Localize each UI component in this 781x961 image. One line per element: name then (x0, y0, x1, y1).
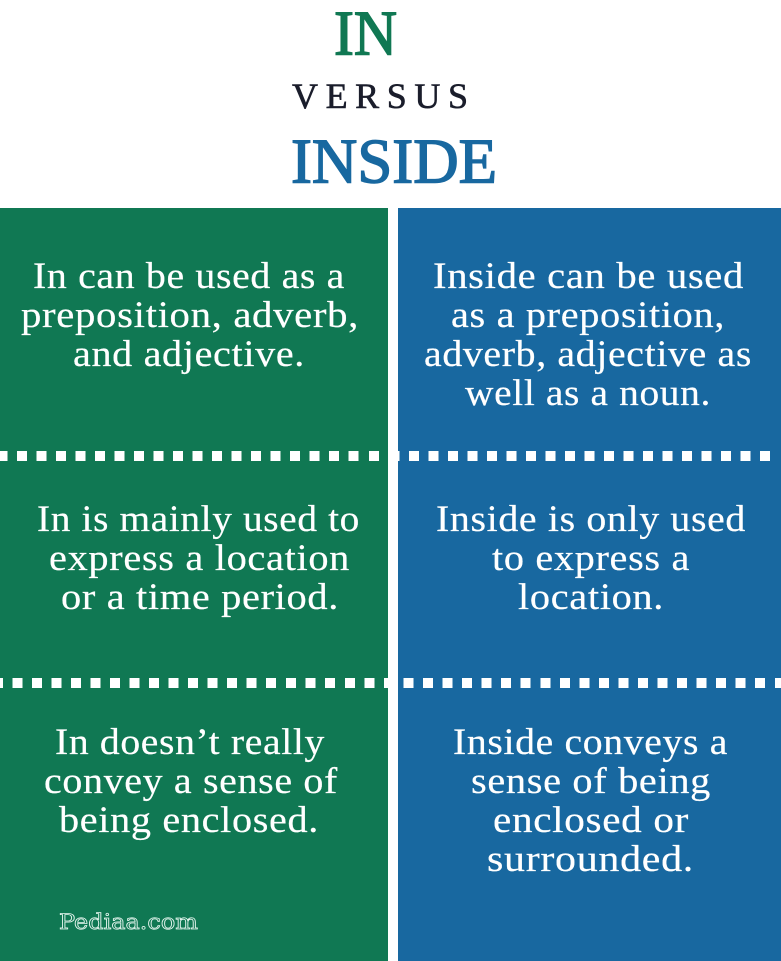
divider: first dotted row (0, 451, 770, 461)
title: INSIDE: INSIDE (291, 126, 497, 196)
text block: Inside sense (453, 722, 728, 880)
text block: In usage: or a time period. (61, 577, 339, 618)
panel: In column (0, 208, 388, 961)
text block: Inside parts of speech: Inside can be used (433, 256, 744, 297)
text block: In sense: In doesn’t really (55, 722, 325, 763)
text block: Inside usage (436, 499, 746, 618)
text block: In sense (44, 722, 338, 841)
text block: In parts of speech (21, 256, 359, 375)
text block: Inside usage: location. (518, 577, 664, 618)
text block: In sense: being enclosed. (59, 800, 319, 841)
text block: Inside parts of speech: well as a noun. (465, 373, 711, 414)
text block: Inside sense: surrounded. (487, 839, 694, 880)
logo: Pediaa.com: Pediaa.com (59, 910, 198, 934)
text block: Inside sense: enclosed or (493, 800, 689, 841)
text block: Inside parts of speech (424, 256, 752, 414)
text block: Inside sense: Inside conveys a (453, 722, 728, 763)
heading: VERSUS: VERSUS (292, 76, 468, 116)
panel: Inside column (398, 208, 781, 961)
text block: In usage: In is mainly used to (37, 499, 360, 540)
divider: second dotted row (0, 678, 781, 688)
text block: Inside sense: sense of being (471, 761, 711, 802)
text block: In usage (37, 499, 360, 618)
text block: In parts of speech: and adjective. (73, 334, 305, 375)
text block: Inside usage: to express a (492, 538, 690, 579)
text block: In sense: convey a sense of (44, 761, 338, 802)
text block: Inside parts of speech: adverb, adjective as (424, 334, 752, 375)
text block: In parts of speech: preposition, adverb, (21, 295, 359, 336)
text block: Inside usage: Inside is only used (436, 499, 746, 540)
text block: Inside parts of speech: as a preposition, (451, 295, 725, 336)
text block: In parts of speech: In can be used as a (33, 256, 345, 297)
text block: In usage: express a location (49, 538, 350, 579)
